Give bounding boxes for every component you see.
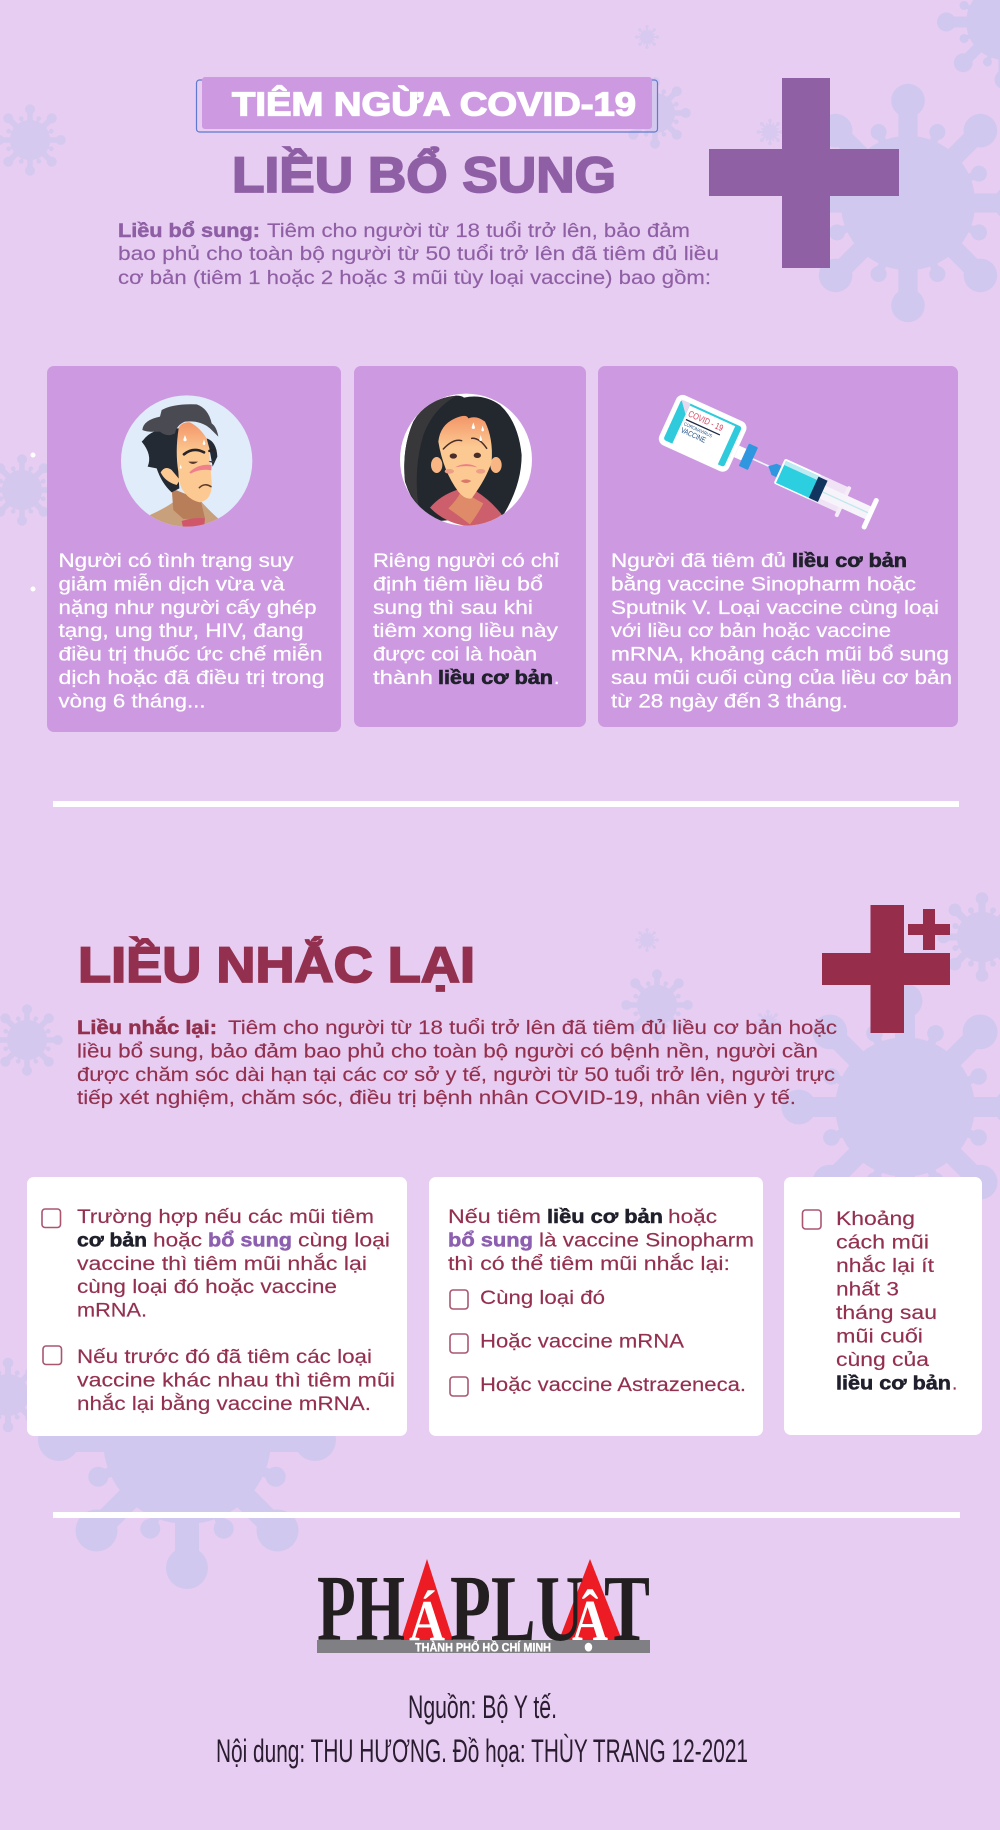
panel: booster interval xyxy=(784,1177,982,1435)
icon: sick woman avatar xyxy=(400,394,532,527)
intro text: liều bổ sung: Tiêm cho người từ 18 tuổi trở lên, bảo đảm xyxy=(267,220,690,242)
icon: vaccine vial and syringe: COVID - 19 xyxy=(687,409,725,433)
intro text: liều bổ sung: bao phủ cho toàn bộ người từ 50 tuổi trở lên đã tiêm đủ liều xyxy=(118,243,719,265)
icon: large plus xyxy=(709,78,899,268)
text: card one: vòng 6 tháng... xyxy=(58,691,206,712)
text: same vaccine case: cùng loại xyxy=(298,1230,390,1252)
footer: source and credits xyxy=(216,1689,748,1769)
logo: Pháp Luật: T xyxy=(604,1557,650,1661)
heading: liều nhắc lại: LIỀU NHẮC LẠI xyxy=(78,937,475,993)
text: card one: dịch hoặc đã điều trị trong xyxy=(58,668,324,689)
logo: Pháp Luật: PLU xyxy=(450,1557,584,1661)
text: card one xyxy=(58,551,324,712)
icon: checkbox xyxy=(802,1210,821,1229)
text: card one: Người có tình trạng suy xyxy=(58,551,294,572)
text: card three: Sputnik V. Loại vaccine cùng loại xyxy=(611,598,939,619)
text: same vaccine case: mRNA. xyxy=(77,1300,147,1322)
intro text: liều nhắc lại: được chăm sóc dài hạn tại các cơ sở y tế, người từ 50 tuổi trở lên, người trực xyxy=(77,1064,835,1086)
text: interval: nhất 3 xyxy=(836,1280,899,1300)
text: card two xyxy=(373,551,560,689)
text: interval: Khoảng xyxy=(836,1209,915,1230)
text: mixed vaccine case: nhắc lại bằng vaccine mRNA. xyxy=(77,1393,371,1415)
text: card two: Riêng người có chỉ xyxy=(373,551,560,572)
text: Sinopharm condition: hoặc xyxy=(668,1207,717,1228)
text: card three: bằng vaccine Sinopharm hoặc xyxy=(611,573,916,595)
icon: vaccine vial and syringe xyxy=(656,393,885,536)
panel: Sinopharm booster options xyxy=(429,1177,763,1436)
text: card one: giảm miễn dịch vừa và xyxy=(58,573,285,595)
text: Sinopharm condition: bổ sung xyxy=(448,1230,533,1252)
logo: Pháp Luật xyxy=(317,1557,650,1661)
option: mRNA: Hoặc vaccine mRNA xyxy=(480,1332,684,1352)
logo: Pháp Luật: Ậ xyxy=(572,1588,608,1653)
text: interval: mũi cuối xyxy=(836,1326,923,1348)
text: same vaccine case: vaccine thì tiêm mũi nhắc lại xyxy=(77,1253,367,1275)
icon: vaccine vial and syringe: VACCINE xyxy=(679,426,707,445)
text: Sinopharm condition: liều cơ bản xyxy=(547,1207,663,1228)
text: interval: nhắc lại ít xyxy=(836,1255,935,1277)
text: Sinopharm condition: Nếu tiêm xyxy=(448,1207,541,1228)
text: card two: thành xyxy=(373,668,433,689)
text: card one: điều trị thuốc ức chế miễn xyxy=(58,644,322,666)
intro text: liều nhắc lại: tiếp xét nghiệm, chăm sóc, điều trị bệnh nhân COVID-19, nhân viên y tế. xyxy=(77,1087,796,1109)
text: card three: từ 28 ngày đến 3 tháng. xyxy=(611,691,848,712)
text: card one: nặng như người cấy ghép xyxy=(58,598,316,619)
intro text: liều nhắc lại: liều bổ sung, bảo đảm bao phủ cho toàn bộ người có bệnh nền, người cần xyxy=(77,1040,818,1062)
text: card three: với liều cơ bản hoặc vaccine xyxy=(611,621,891,642)
text: same vaccine case: hoặc xyxy=(153,1230,202,1252)
text: same vaccine case xyxy=(77,1207,390,1322)
text: interval: cùng của xyxy=(836,1350,930,1371)
intro text: liều bổ sung: cơ bản (tiêm 1 hoặc 2 hoặc 3 mũi tùy loại vaccine) bao gồm: xyxy=(118,267,711,289)
text: mixed vaccine case: Nếu trước đó đã tiêm các loại xyxy=(77,1347,372,1368)
panel: immunocompromised people xyxy=(47,366,341,732)
text: Sinopharm condition: thì có thể tiêm mũi nhắc lại: xyxy=(448,1253,730,1275)
text: same vaccine case: bổ sung xyxy=(208,1230,292,1252)
icon: vaccine vial and syringe: CORONAVIRUS xyxy=(683,421,713,439)
text: mixed vaccine case xyxy=(77,1347,395,1415)
icon: red plus with small plus xyxy=(822,905,950,1033)
text: card three: liều cơ bản xyxy=(792,551,907,572)
intro text: liều bổ sung xyxy=(118,220,719,289)
option: Astrazeneca: Hoặc vaccine Astrazeneca. xyxy=(480,1375,746,1396)
text: card three: Người đã tiêm đủ xyxy=(611,551,786,572)
text: Sinopharm condition: là vaccine Sinopharm xyxy=(539,1230,754,1252)
option: same type: Cùng loại đó xyxy=(480,1288,605,1309)
panel: same or mixed vaccine booster xyxy=(27,1177,407,1436)
icon: sick man avatar xyxy=(121,395,252,532)
intro text: liều bổ sung: Liều bổ sung: xyxy=(118,220,260,242)
text: card three xyxy=(611,551,952,712)
text: same vaccine case: cơ bản xyxy=(77,1230,147,1252)
logo: Pháp Luật: Á xyxy=(409,1588,445,1653)
white dots xyxy=(30,452,36,592)
icon: checkbox one xyxy=(42,1209,60,1228)
icon: checkbox two xyxy=(43,1346,62,1364)
text: interval: tháng sau xyxy=(836,1303,937,1324)
text: card two: sung thì sau khi xyxy=(373,598,533,619)
intro text: liều nhắc lại: Liều nhắc lại: xyxy=(77,1015,217,1039)
text: interval xyxy=(836,1209,957,1394)
logo: Pháp Luật: THÀNH PHỐ HỒ CHÍ MINH xyxy=(415,1640,551,1654)
panel: indicated supplementary dose xyxy=(354,366,586,727)
text: same vaccine case: Trường hợp nếu các mũi tiêm xyxy=(77,1207,374,1228)
heading: liều bổ sung: LIỀU BỔ SUNG xyxy=(232,146,616,203)
panel: Sinopharm or Sputnik V recipients xyxy=(598,366,958,727)
text: card three: mRNA, khoảng cách mũi bổ sung xyxy=(611,645,949,666)
text: card two: được coi là hoàn xyxy=(373,645,537,666)
text: same vaccine case: cùng loại đó hoặc vaccine xyxy=(77,1277,337,1298)
text: card two: . xyxy=(554,668,559,689)
text: interval: . xyxy=(952,1374,957,1394)
text: card two: tiêm xong liều này xyxy=(373,621,559,642)
text: Sinopharm condition xyxy=(448,1207,754,1275)
text: card two: định tiêm liều bổ xyxy=(373,574,543,595)
header: banner: TIÊM NGỪA COVID-19 xyxy=(232,86,636,122)
text: interval: liều cơ bản xyxy=(836,1374,951,1394)
intro text: liều nhắc lại: Tiêm cho người từ 18 tuổi trở lên đã tiêm đủ liều cơ bản hoặc xyxy=(228,1017,837,1039)
logo: Pháp Luật: PH xyxy=(317,1557,405,1661)
text: card two: liều cơ bản xyxy=(438,668,553,689)
footer: source and credits: Nguồn: Bộ Y tế. xyxy=(408,1689,557,1725)
text: mixed vaccine case: vaccine khác nhau thì tiêm mũi xyxy=(77,1370,395,1392)
option: same type xyxy=(450,1288,605,1309)
text: card one: tạng, ung thư, HIV, đang xyxy=(58,621,304,642)
intro text: liều nhắc lại xyxy=(77,1015,837,1109)
header: banner xyxy=(196,77,658,132)
text: interval: cách mũi xyxy=(836,1232,929,1254)
text: card three: sau mũi cuối cùng của liều cơ bản xyxy=(611,668,952,689)
